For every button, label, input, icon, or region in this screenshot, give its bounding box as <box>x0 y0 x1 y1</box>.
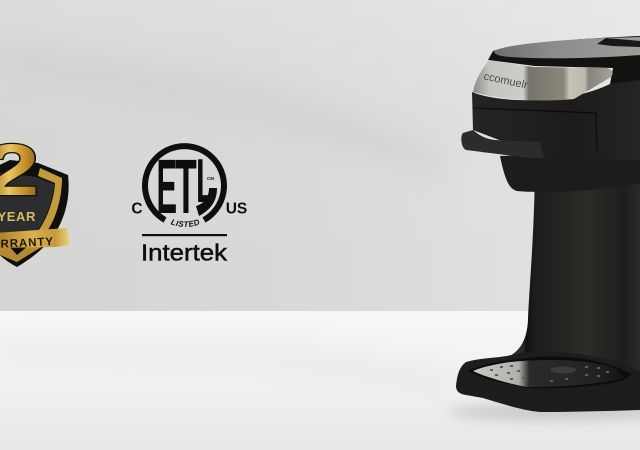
letter L: L <box>196 148 215 216</box>
handle <box>461 130 544 158</box>
gold chevron <box>0 246 43 262</box>
icon: ETL listed Intertek certification mark <box>131 143 247 266</box>
floor shadows <box>0 338 640 421</box>
shield outer <box>0 160 69 267</box>
column <box>505 170 640 385</box>
shield dark inner <box>0 172 54 234</box>
C label: C <box>131 200 143 218</box>
US label: US <box>226 200 247 218</box>
letter E: E <box>156 145 177 230</box>
lid underside <box>488 36 640 84</box>
drip holes <box>490 365 609 382</box>
wall background <box>0 0 640 311</box>
letter T: T <box>175 144 197 230</box>
floor <box>0 311 640 450</box>
Intertek wordmark: Intertek <box>141 240 227 266</box>
head body <box>472 78 640 160</box>
letter L swoosh <box>196 188 217 216</box>
listed label <box>164 221 207 227</box>
warranty ribbon <box>0 228 70 248</box>
drip tray rim <box>467 357 632 388</box>
drip tray grate <box>473 360 625 387</box>
silver band <box>473 60 613 100</box>
coffee maker <box>456 36 640 412</box>
top handle slot <box>597 38 640 47</box>
icon: 2 year warranty shield badge <box>0 129 70 267</box>
CM mark: CM <box>207 176 214 181</box>
black chevron <box>9 246 28 255</box>
lid top <box>494 37 640 58</box>
front door seam <box>473 108 597 153</box>
drain circle <box>550 366 576 374</box>
outer ring <box>145 146 224 220</box>
base <box>456 351 640 412</box>
basket cup <box>500 152 640 192</box>
shield gold rim <box>36 168 62 234</box>
brand label: ccomuelr <box>483 71 529 92</box>
soft wall shadow <box>0 40 440 175</box>
rule <box>142 234 227 236</box>
listed text: LISTED <box>170 219 200 227</box>
